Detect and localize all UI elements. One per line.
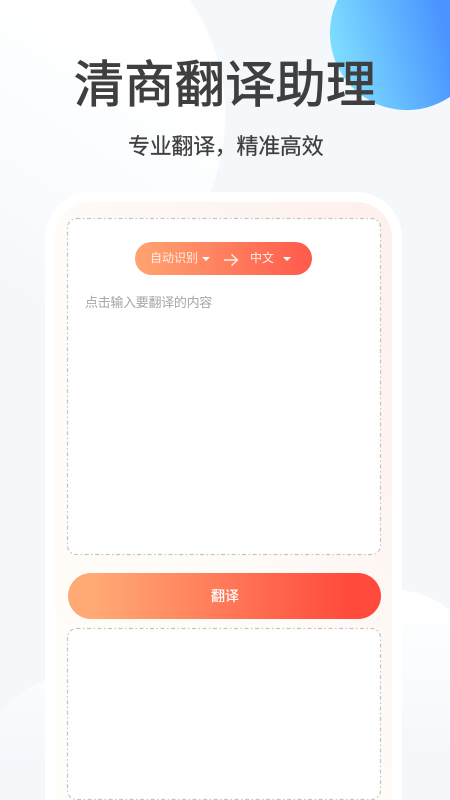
translate button label: 翻译 xyxy=(211,588,239,604)
input placeholder text: 点击输入要翻译的内容 xyxy=(85,295,212,310)
subtitle: 专业翻译，精准高效 xyxy=(128,134,323,159)
phone frame xyxy=(45,192,402,800)
language selector pill xyxy=(135,242,312,275)
arrow icon xyxy=(224,254,238,266)
dropdown icon: target xyxy=(283,257,291,261)
title: 清商翻译助理 xyxy=(74,57,376,113)
input panel xyxy=(66,218,382,556)
source language label: 自动识别 xyxy=(150,251,198,265)
dropdown icon: source xyxy=(202,257,210,261)
output panel xyxy=(66,628,382,800)
target language label: 中文 xyxy=(250,251,274,265)
phone screen xyxy=(55,202,392,800)
translate button xyxy=(68,573,381,619)
